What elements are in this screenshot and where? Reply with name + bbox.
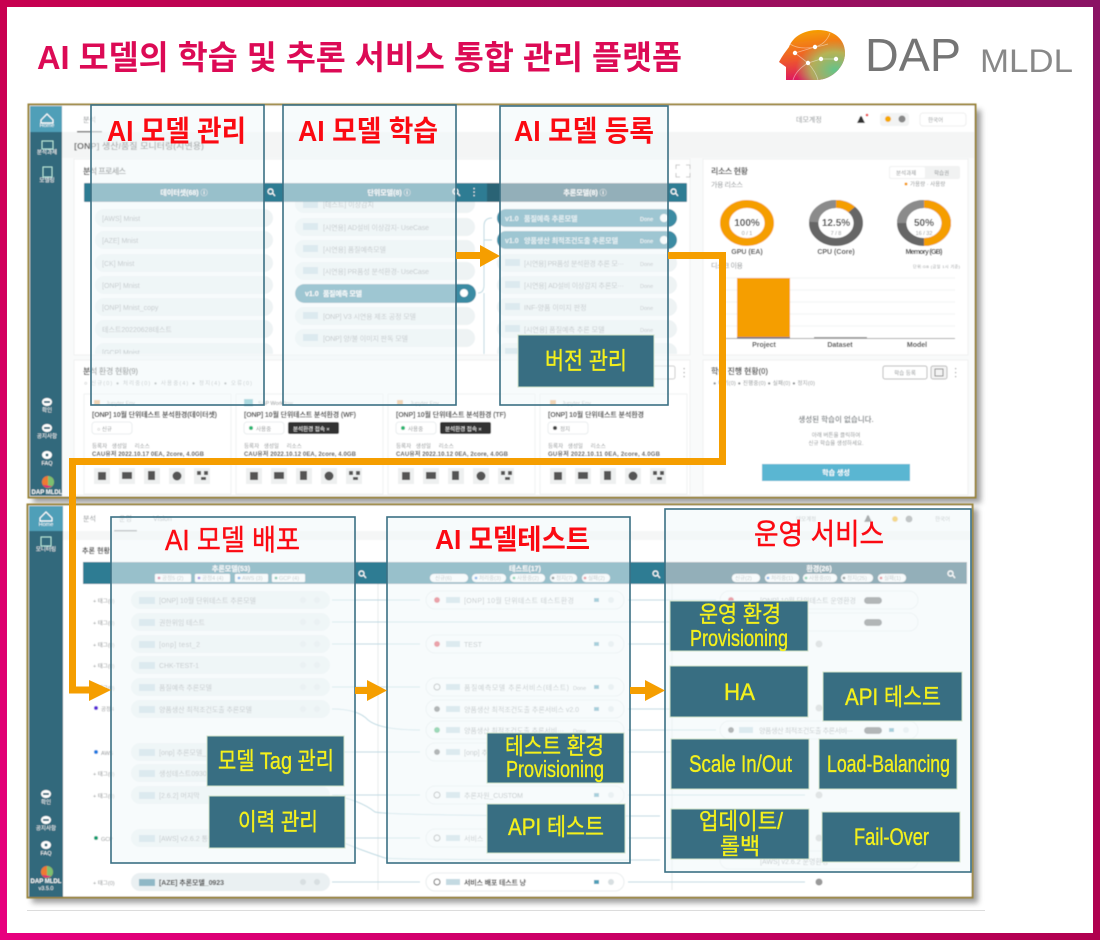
card: analysis environments: CAU유저 2022.10.12 0EA, 2core, 4.0GB xyxy=(396,450,509,458)
card: resource status xyxy=(703,159,968,355)
list: datasets: [ONP] Mnist_copy xyxy=(102,305,159,312)
rows: tests: 서비스 xyxy=(464,834,484,843)
rows: inference models: + 태그(0) xyxy=(93,641,115,649)
connectors xyxy=(478,218,492,355)
feature: 이력 관리: 이력 관리 xyxy=(238,809,318,836)
tabs: 분석 xyxy=(83,514,96,523)
rows: inference models: [ONP] 10월 단위테스트 추론모델 xyxy=(159,596,256,605)
box: 운영 서비스 xyxy=(665,509,971,872)
lists xyxy=(95,195,677,361)
rows: environments: [AWS] v2.6.2 운영환경 xyxy=(760,857,828,866)
list: inference models: Done xyxy=(640,217,653,223)
card: analysis environments: ○ 신규(0) ● 처리중(0) ● 사용중(4) ● 정지(4) ● 오류(0) xyxy=(84,379,252,387)
feature: HA: HA xyxy=(724,679,755,706)
rows: inference models: 품질예측 추론모델 xyxy=(159,683,212,692)
sidebar xyxy=(30,106,63,496)
sidebar: DAP MLDL xyxy=(32,490,63,496)
sidebar: DAP MLDL xyxy=(31,879,62,885)
list: unit models: [시연용] PR품성 분석환경- UseCase xyxy=(323,267,429,276)
rows: inference models: AWS xyxy=(101,751,114,757)
card: analysis process: 분석 프로세스 xyxy=(83,166,127,176)
list: datasets: [GCP] Mnist xyxy=(102,350,140,357)
feature: Scale In/Out: Scale In/Out xyxy=(689,751,792,778)
workspace title: [ONP] 생산/품질 모니터링(시연용) xyxy=(74,141,204,151)
header bar: 처리중(1) xyxy=(771,574,793,582)
card: training progress xyxy=(703,360,968,495)
list: datasets: [AZE] Mnist xyxy=(102,238,138,245)
heading: AI 모델 등록: AI 모델 등록 xyxy=(514,115,654,148)
rows: tests: Done xyxy=(573,729,586,735)
arrow: 테스트 to 운영 xyxy=(630,680,665,701)
list: inference models: v1.0 xyxy=(505,216,519,223)
feature: 모델 Tag 관리: 모델 Tag 관리 xyxy=(218,748,334,775)
tabs xyxy=(82,514,950,555)
arrow: into AI 모델 배포 xyxy=(89,680,111,701)
card: analysis environments: Jupyter Env xyxy=(410,401,439,407)
feature: 버전 관리: 버전 관리 xyxy=(545,348,627,375)
list: inference models: Done xyxy=(640,284,653,290)
header bar: 테스트(17) xyxy=(509,564,541,573)
rows: inference models: + 태그(0) xyxy=(93,792,115,800)
donut: Memory: 50% xyxy=(914,218,934,229)
rows: inference models: [onp] test_2 xyxy=(159,642,200,649)
rows: inference models: [AWS] v2.6.2 통합 xyxy=(159,834,215,843)
card: analysis environments: CAU유저 2022.10.12 0EA, 2core, 4.0GB xyxy=(244,450,357,458)
card: analysis environments: 분석 환경 현황(9) xyxy=(83,366,138,376)
list: inference models: Done xyxy=(640,262,653,268)
card: training progress: 신규 학습을 생성하세요. xyxy=(808,439,864,447)
title: AI 모델의 학습 및 추론 서비스 통합 관리 플랫폼 xyxy=(37,39,682,76)
sidebar: FAQ xyxy=(40,851,52,857)
header bar: GCP (4) xyxy=(279,576,299,582)
rows: inference models: + 태그(0) xyxy=(93,879,115,887)
rows: inference models: + 태그(0) xyxy=(93,662,115,670)
panel shadow: top screenshot xyxy=(33,110,981,503)
feature: 업데이트/롤백: 업데이트/ xyxy=(699,808,784,834)
rows: environments: 양품생산 최적조건도출 추론서비··· xyxy=(759,726,853,735)
feature: 버전 관리 xyxy=(518,335,654,387)
feature: Fail-Over: Fail-Over xyxy=(854,824,929,851)
card: analysis environments: ○ 신규 xyxy=(97,425,112,433)
list: inference models: Done xyxy=(640,328,653,334)
top bar: 한국어 xyxy=(928,116,943,124)
list: datasets: [ONP] Mnist xyxy=(102,283,140,290)
tabs: 운영 xyxy=(119,514,132,523)
donut: GPU xyxy=(725,204,769,256)
rows: environments xyxy=(720,591,918,886)
donut: GPU: GPU (EA) xyxy=(731,249,763,256)
arrow: 배포 to 테스트 xyxy=(355,680,387,701)
feature: 운영 환경 Provisioning: Provisioning xyxy=(690,625,788,651)
list: unit models: [시연용] 품질예측모델 xyxy=(323,245,386,254)
rows: tests: 양품생산 최적조건도출 추론서비··· xyxy=(464,726,564,735)
feature: 업데이트/롤백: 롤백 xyxy=(720,833,760,859)
panel: operations dashboard screenshot xyxy=(28,504,972,898)
list: unit models: [ONP] V3 시연용 제조 공정 모델 xyxy=(323,312,416,321)
header bar: 처리중(3) xyxy=(479,574,501,582)
arrow: registration to deployment flow line xyxy=(72,256,722,690)
feature: 운영 환경 Provisioning: 운영 환경 xyxy=(699,601,781,627)
feature: Fail-Over xyxy=(822,812,960,862)
rows: tests: Done xyxy=(573,686,586,692)
header bar: 정지(7) xyxy=(556,574,573,582)
card: analysis environments: Jupyter Env xyxy=(562,401,591,407)
rows: tests: TEST xyxy=(464,642,483,649)
card: resource status: 학습권 xyxy=(934,169,949,177)
tabs: 한국어 xyxy=(935,515,950,523)
card: analysis environments: 사용중 xyxy=(408,425,423,433)
card: analysis process xyxy=(74,159,690,361)
header bar: 실패(1) xyxy=(884,574,901,582)
rows: tests: 양품생산 최적조건도출 추론서비스 v2.0 xyxy=(464,705,579,714)
rows: inference models: CHK-TEST-1 xyxy=(159,663,199,670)
header bar: 정지(25) xyxy=(847,574,867,582)
card: analysis environments: 등록자 생성일 리소스 xyxy=(244,442,302,450)
card: analysis environments: 등록자 생성일 리소스 xyxy=(548,442,606,450)
list: inference models: [시연용] PR품성 분석환경 추론 모··· xyxy=(524,259,624,268)
rows: tests: 품질예측모델 추론서비스(테스트) xyxy=(464,683,569,692)
rows: tests: 추론자원_CUSTOM xyxy=(464,791,523,800)
sidebar: v3.5.0 xyxy=(39,886,53,892)
connectors xyxy=(332,600,805,882)
feature: HA xyxy=(670,666,808,717)
panel shadow: bottom screenshot xyxy=(32,509,978,903)
rows: inference models: 권한위임 테스트 xyxy=(159,619,206,627)
top bar xyxy=(62,106,974,132)
sidebar: FAQ xyxy=(41,461,53,467)
header bar: 공정4 (4) xyxy=(202,575,224,582)
donut: CPU: 7 / 8 xyxy=(831,231,841,237)
logo text: DAP: DAP xyxy=(865,29,961,81)
card: training progress: 생성된 학습이 없습니다. xyxy=(798,414,874,424)
header bar: 사용중(0) xyxy=(809,574,831,582)
feature: 운영 환경 Provisioning xyxy=(670,601,808,651)
donut: CPU: CPU (Core) xyxy=(817,249,855,256)
card: training progress: ● 대기(0) ● 진행중(0) ● 실패(0) ● 정지(0) xyxy=(713,379,815,387)
rows: inference models: [AZE] 추론모델_0923 xyxy=(159,878,224,887)
box: AI 모델 관리 xyxy=(91,105,264,405)
card: analysis environments: 분석환경 접속 × xyxy=(445,425,482,433)
list: inference models: [시연용] AD설비 이상감지 추론모··· xyxy=(524,281,624,290)
rows: tests: [onp] 추론 xyxy=(464,749,495,757)
card: resource status: 리소스 현황 xyxy=(711,166,749,176)
list: datasets: [AWS] Mnist xyxy=(102,216,140,223)
rows: inference models: [2.6.2] 머지막 xyxy=(159,791,200,800)
list: inference models: INF-양품 이미지 판정 xyxy=(524,303,587,312)
feature: 테스트 환경 Provisioning: 테스트 환경 xyxy=(505,733,604,759)
list: datasets xyxy=(95,209,273,361)
card: analysis environments: [ONP] 10월 단위테스트 분석환경 (TF) xyxy=(396,410,506,419)
tabs: Vision xyxy=(153,516,172,523)
sidebar: 확인 xyxy=(42,406,52,414)
list: unit models: [테스트] 이상감지 xyxy=(323,200,374,209)
list: inference models: 품질예측 추론모델 xyxy=(524,214,578,223)
rows: inference models: 생성테스트0930 xyxy=(159,769,207,778)
sidebar: 공지사항 xyxy=(36,824,56,832)
rows: inference models: 공정4 xyxy=(101,706,114,713)
bar chart: disk usage: Project xyxy=(752,342,777,349)
heading: AI 모델테스트: AI 모델테스트 xyxy=(435,524,590,555)
card: analysis environments: [ONP] 10월 단위테스트 분석환경 xyxy=(548,410,644,419)
heading: 운영 서비스: 운영 서비스 xyxy=(754,519,884,551)
sidebar: Home xyxy=(39,522,53,528)
heading: AI 모델 관리: AI 모델 관리 xyxy=(107,115,246,148)
list: unit models: 품질예측 모델 xyxy=(323,289,363,298)
header bar: 추론모델(53) xyxy=(212,564,250,573)
feature: API 테스트 (operations): API 테스트 xyxy=(845,684,941,711)
top bar: 분석 xyxy=(83,115,96,124)
sidebar: Home xyxy=(40,123,54,129)
card: analysis environments: 분석환경 접속 × xyxy=(293,425,330,433)
feature: 모델 Tag 관리 xyxy=(207,736,344,786)
sidebar: 모니터링 xyxy=(36,545,56,553)
card: training progress: 아래 버튼을 클릭하여 xyxy=(812,431,860,439)
top bar: 데모계정 xyxy=(796,115,822,124)
header bar xyxy=(83,562,967,584)
tabs: 추론 현황 xyxy=(82,546,111,555)
header bar: 환경(26) xyxy=(806,564,832,573)
list: unit models: [시연용] AD설비 이상감지- UseCase xyxy=(323,223,429,232)
list: inference models xyxy=(497,209,677,361)
feature: 업데이트/롤백 xyxy=(671,808,809,859)
list: inference models: 양품생산 최적조건도출 추론모델 xyxy=(524,236,619,245)
donut: Memory: 16 / 32 xyxy=(916,231,932,237)
feature: 테스트 환경 Provisioning: Provisioning xyxy=(506,756,604,782)
rows: inference models xyxy=(93,591,330,891)
icon: colourful head xyxy=(779,30,845,80)
list: datasets: [CK] Mnist xyxy=(102,261,134,268)
card: analysis environments: Jupyter Env xyxy=(106,401,135,407)
box: AI 모델 등록 xyxy=(500,106,668,405)
card: analysis process: 데이터셋(68) ⓘ xyxy=(160,188,208,197)
card: analysis process: 추론모델(8) ⓘ xyxy=(563,188,607,197)
action icons xyxy=(94,468,666,484)
card: analysis environments: CAU유저 2022.10.17 0EA, 2core, 4.0GB xyxy=(92,450,205,458)
list: unit models: [ONP] 양/불 이미지 판독 모델 xyxy=(323,334,408,343)
rows: tests: [ONP] 10월 단위테스트 테스트환경 xyxy=(464,596,574,605)
list: inference models: v1.0 xyxy=(505,238,519,245)
rows: inference models: + 태그(0) xyxy=(93,597,115,605)
heading: AI 모델 배포: AI 모델 배포 xyxy=(165,525,300,557)
donut: GPU: 100% xyxy=(734,218,760,229)
header bar: AWS (3) xyxy=(242,576,263,582)
panel: analysis dashboard screenshot xyxy=(28,104,976,498)
card: analysis environments: [ONP] 10월 단위테스트 분석환경 (WF) xyxy=(244,410,356,419)
header bar: 신규(2) xyxy=(735,574,752,582)
card: analysis environments: SAP Workflow xyxy=(258,401,293,407)
card: analysis environments: GU유저 2022.10.11 0EA, 2core, 4.0GB xyxy=(548,450,661,458)
card: training progress: 학습 진행 현황(0) xyxy=(711,366,768,376)
card: analysis environments: 정지 xyxy=(560,425,570,433)
donut: CPU xyxy=(814,204,858,256)
arrow: 학습 to 등록 xyxy=(456,245,500,267)
card: analysis environments: [ONP] 10월 단위테스트 분석환경(데이터셋) xyxy=(92,410,217,419)
feature: Scale In/Out xyxy=(671,739,809,789)
feature: 테스트 환경 Provisioning xyxy=(487,733,624,783)
card: training progress: 학습 생성 xyxy=(822,468,850,477)
sidebar: 분석과제 xyxy=(37,148,57,156)
rows: inference models: + 태그(0) xyxy=(93,770,115,778)
list: inference models: Done xyxy=(640,306,653,312)
logo text: MLDL: MLDL xyxy=(980,43,1073,79)
feature: API 테스트 (operations) xyxy=(823,672,962,721)
card: analysis environments: 등록자 생성일 리소스 xyxy=(396,442,454,450)
list: datasets: 테스트20220628테스트 xyxy=(102,326,172,334)
donut: Memory: Memory (GB) xyxy=(906,249,942,256)
card: analysis environments: 사용중 xyxy=(256,425,271,433)
card: analysis environments: 등록자 생성일 리소스 xyxy=(92,442,150,450)
rows: inference models: + 태그(0) xyxy=(93,619,115,627)
logo: DAP MLDL xyxy=(779,29,1073,81)
sidebar: 모델링 xyxy=(39,176,55,184)
donut: GPU: 0 / 1 xyxy=(742,231,752,237)
rows: inference models: + 태그(0) xyxy=(93,684,115,692)
box: AI 모델 학습 xyxy=(283,105,456,405)
header bar: 사용중(2) xyxy=(517,574,539,582)
heading: AI 모델 학습: AI 모델 학습 xyxy=(298,115,438,148)
bar chart: disk usage: Model xyxy=(907,342,927,349)
card: resource status: 가용량 · 사용량 xyxy=(910,180,945,188)
box: AI 모델테스트 xyxy=(387,517,630,863)
card: analysis environments xyxy=(74,360,690,495)
list: unit models xyxy=(295,195,476,347)
bar chart: disk usage: 단위:GB (금일 1시 기준) xyxy=(913,263,961,269)
bar chart: disk usage: Dataset xyxy=(827,342,853,349)
donut: CPU: 12.5% xyxy=(822,218,850,229)
card: training progress: 학습 등록 xyxy=(894,369,916,377)
card: analysis process: 단위모델(8) ⓘ xyxy=(367,188,411,197)
sidebar: 공지사항 xyxy=(37,432,57,440)
card: resource status: 가용 리소스 xyxy=(711,180,744,189)
rows: inference models: 양품생산 최적조건도출 추론모델 xyxy=(159,705,252,714)
rows: tests: 서비스 배포 테스트 냥 xyxy=(464,878,527,887)
list: unit models: v1.0 xyxy=(305,291,319,298)
card: resource status: 분석과제 xyxy=(896,169,916,177)
rows: inference models: [onp] 추론모델_ xyxy=(159,749,206,757)
feature: Load-Balancing xyxy=(819,739,957,789)
bar chart: disk usage: 디스크 이용 xyxy=(711,261,744,270)
donut: Memory xyxy=(902,204,946,256)
rows: tests xyxy=(426,591,624,891)
box: AI 모델 배포 xyxy=(111,517,355,863)
rows: environments: [ONP] 10월 단위테스트 운영환경 xyxy=(760,596,856,605)
sidebar xyxy=(29,506,63,897)
tabs: 데모계정 xyxy=(796,515,816,523)
feature: API 테스트 xyxy=(487,804,625,853)
feature: API 테스트: API 테스트 xyxy=(508,814,604,841)
header bar: 실패(2) xyxy=(588,574,605,582)
list: inference models: [시연용] 품질예측 추론 모델 xyxy=(524,325,605,334)
bar chart: disk usage xyxy=(711,261,961,349)
feature: Load-Balancing: Load-Balancing xyxy=(827,751,950,778)
sidebar: 확인 xyxy=(41,798,51,806)
header bar: 신규(6) xyxy=(435,574,452,582)
feature: 이력 관리 xyxy=(209,796,345,848)
header bar: 공정5 (2) xyxy=(162,575,184,582)
list: inference models: Done xyxy=(640,239,653,245)
rows: inference models: GCP xyxy=(101,837,113,843)
